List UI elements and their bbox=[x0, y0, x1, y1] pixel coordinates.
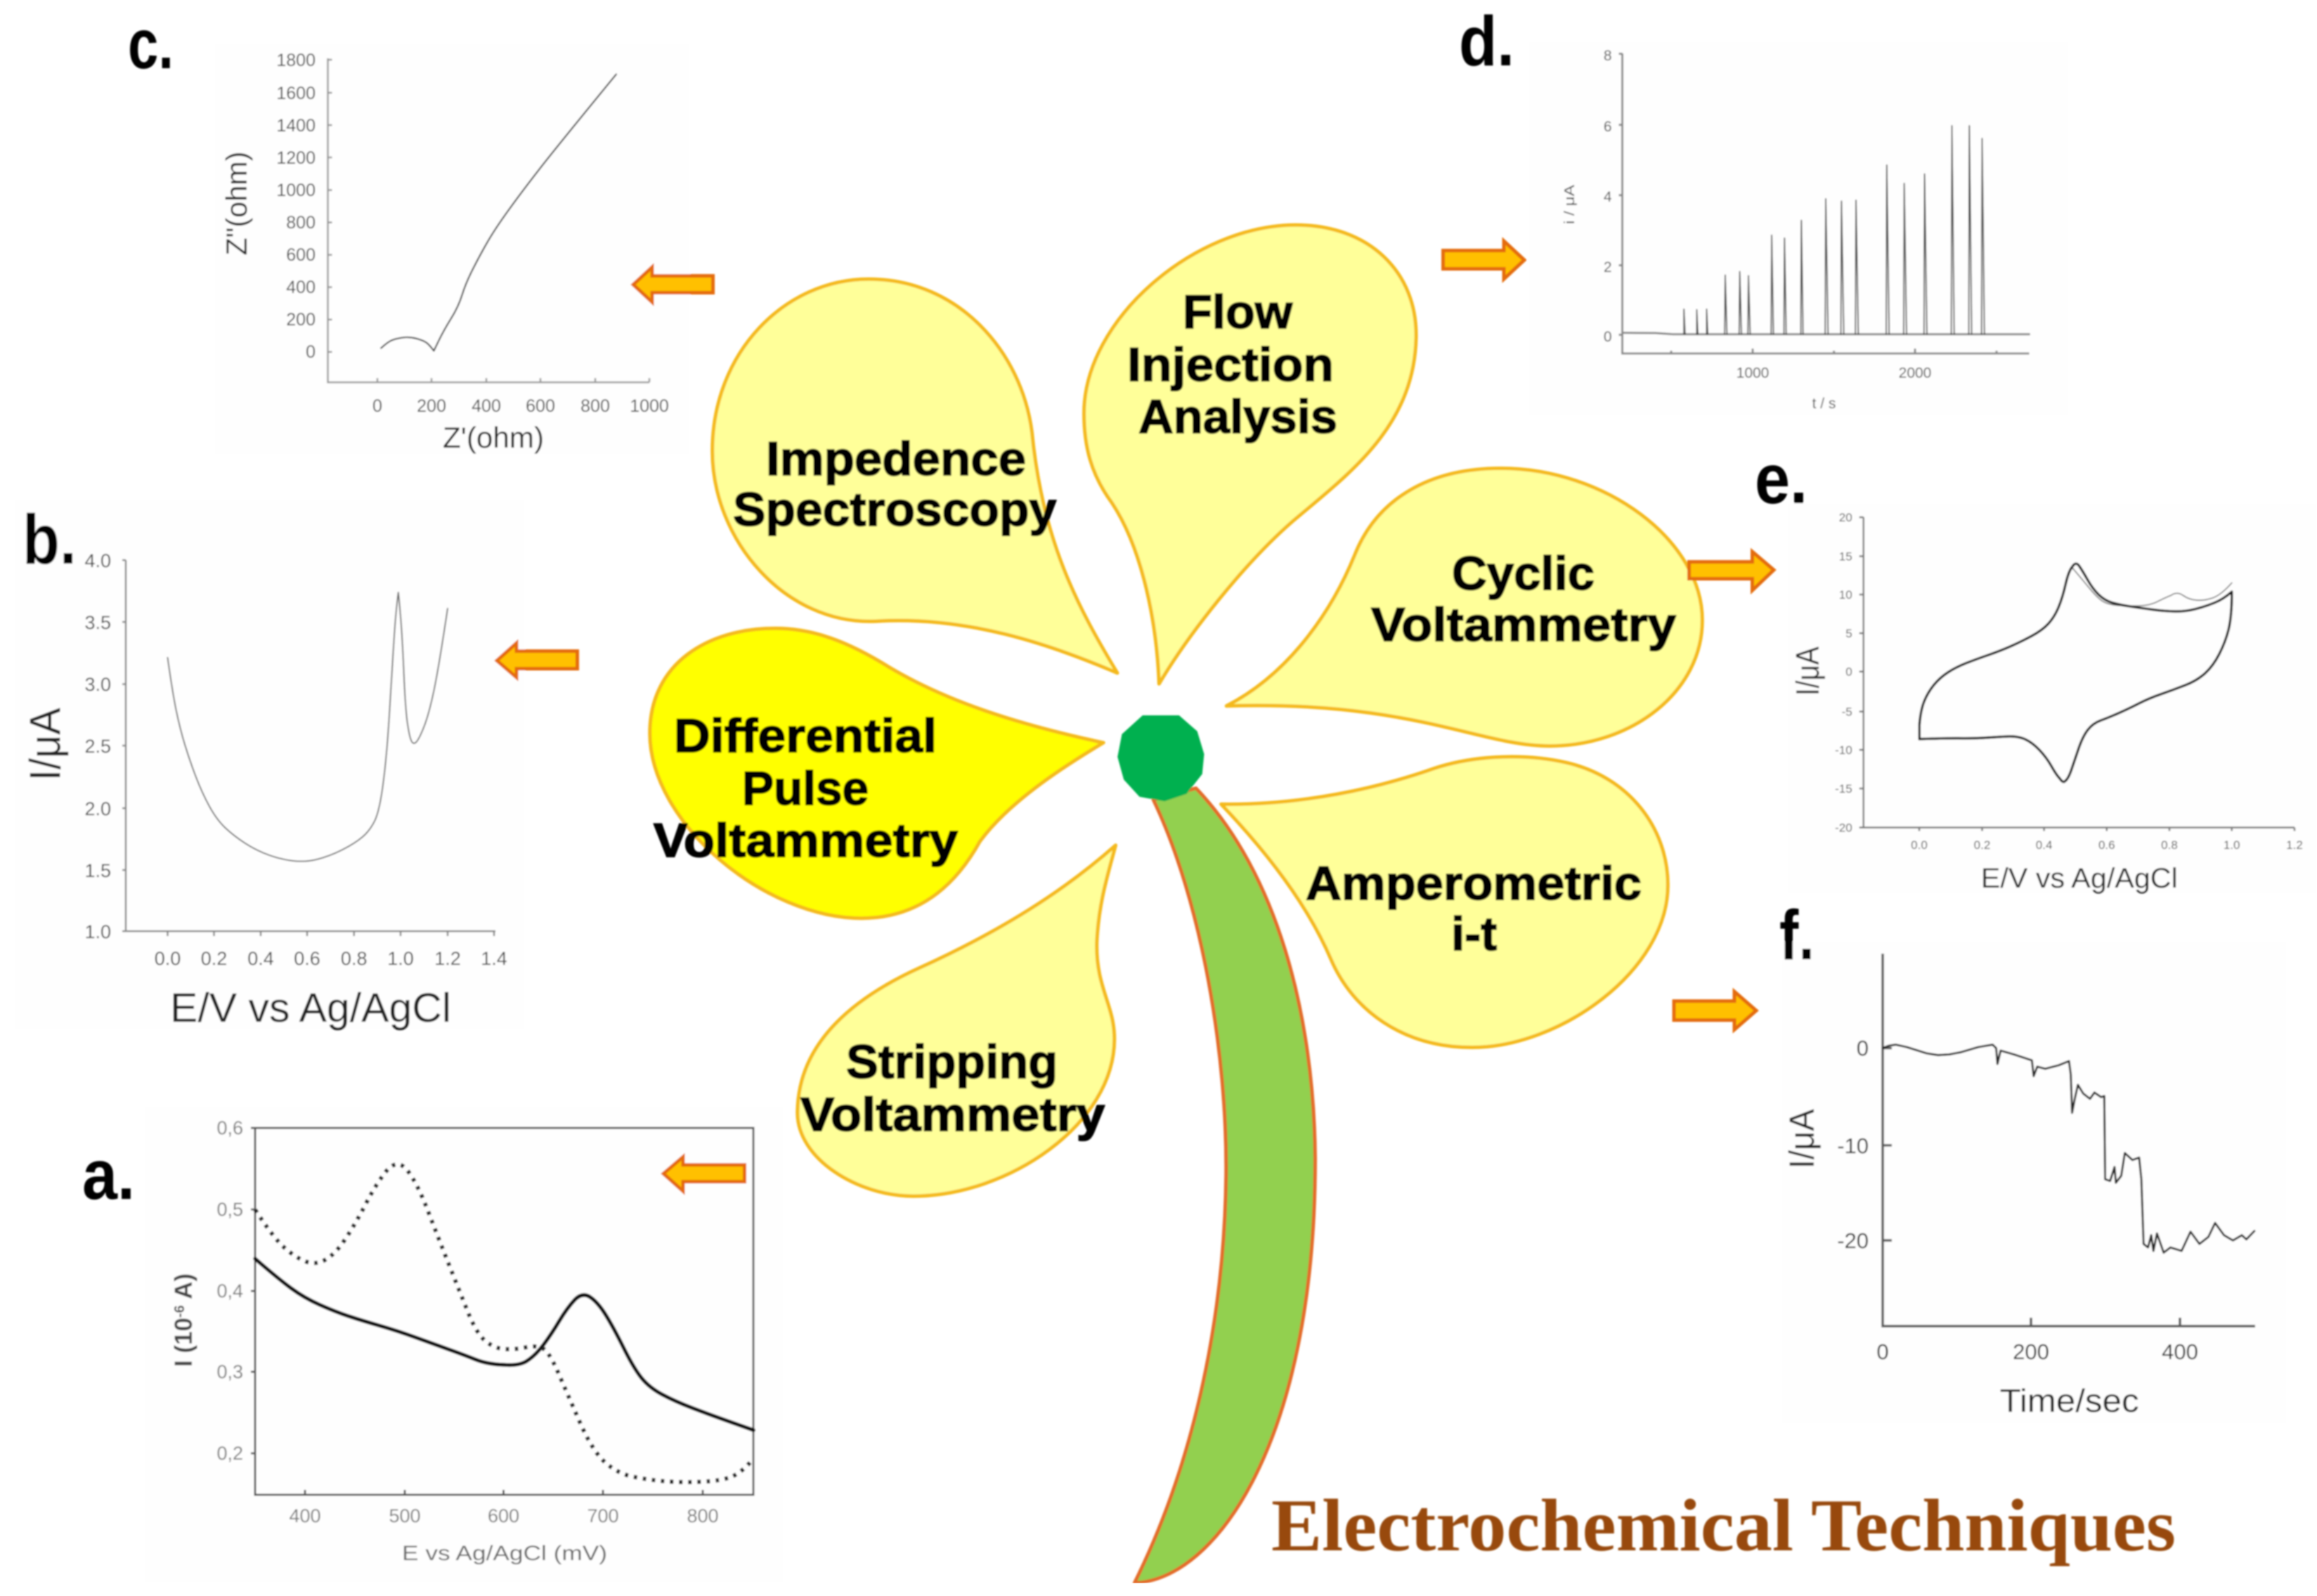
panel a y tick labels bbox=[216, 1117, 243, 1464]
panel b x tick labels bbox=[155, 948, 507, 969]
panel c x tick labels: 0 bbox=[372, 396, 382, 416]
panel c axes bbox=[327, 58, 649, 382]
arrow: flow injection to panel d bbox=[1443, 241, 1524, 279]
panel c letter: c. bbox=[128, 5, 174, 84]
panel a x tick labels: 400 bbox=[289, 1505, 321, 1526]
panel b y tick labels: 1.5 bbox=[84, 860, 111, 881]
label: cyclic voltammetry: Voltammetry bbox=[1371, 598, 1676, 651]
panel c x tick labels: 600 bbox=[526, 396, 555, 416]
panel e y tick labels: 15 bbox=[1839, 550, 1852, 564]
label: impedence spectroscopy: Spectroscopy bbox=[733, 483, 1056, 536]
panel e x tick labels: 0.8 bbox=[2161, 838, 2178, 852]
panel a x tick labels: 500 bbox=[389, 1505, 421, 1526]
panel c y tick labels: 600 bbox=[286, 245, 316, 265]
panel b y tick labels bbox=[84, 550, 111, 942]
label: differential pulse voltammetry: Pulse bbox=[742, 762, 869, 815]
panel b y tick labels: 2.5 bbox=[84, 736, 111, 757]
panel a x axis title: E vs Ag/AgCl (mV) bbox=[402, 1542, 607, 1565]
label: impedence spectroscopy: Impedence bbox=[766, 432, 1026, 486]
panel b letter: b. bbox=[22, 500, 77, 579]
panel d x tick labels: 1000 bbox=[1737, 365, 1769, 381]
panel e y tick labels: -10 bbox=[1835, 744, 1852, 757]
flower centre bbox=[1117, 715, 1204, 801]
panel f curve bbox=[1883, 1044, 2254, 1252]
panel c y tick labels: 800 bbox=[286, 213, 316, 233]
panel d y tick labels: 2 bbox=[1604, 259, 1612, 275]
panel a y axis title: -6 bbox=[172, 1305, 188, 1318]
label: amperometric i-t: Amperometric bbox=[1306, 857, 1642, 910]
panel b y tick labels: 3.5 bbox=[84, 612, 111, 633]
panel a letter: a. bbox=[82, 1136, 135, 1214]
panel d axes bbox=[1619, 53, 2030, 353]
label: flow injection analysis: Analysis bbox=[1138, 390, 1337, 443]
arrow: stripping to panel a bbox=[663, 1157, 745, 1191]
panel b axes bbox=[122, 560, 495, 936]
panel e x tick labels: 1.0 bbox=[2224, 838, 2240, 852]
label: amperometric i-t: i-t bbox=[1451, 907, 1497, 961]
title: Electrochemical Techniques bbox=[1271, 1484, 2176, 1566]
panel c x tick labels: 200 bbox=[417, 396, 446, 416]
panel a dotted curve bbox=[255, 1164, 753, 1482]
panel e x axis title: E/V vs Ag/AgCl bbox=[1981, 863, 2178, 894]
label: stripping voltammetry: Voltammetry bbox=[800, 1088, 1105, 1141]
panel a x tick labels: 600 bbox=[488, 1505, 519, 1526]
panel a frame and ticks bbox=[251, 1128, 753, 1495]
panel c: impedance Nyquist plot bbox=[128, 5, 690, 455]
petal: cyclic voltammetry bbox=[1226, 468, 1702, 746]
panel f x tick labels: 0 bbox=[1876, 1339, 1889, 1364]
panel e y tick labels: 20 bbox=[1839, 511, 1852, 524]
label: stripping voltammetry bbox=[800, 1035, 1105, 1141]
panel d y tick labels: 6 bbox=[1604, 119, 1612, 135]
panel a x tick labels: 700 bbox=[587, 1505, 619, 1526]
panel b x tick labels: 0.6 bbox=[294, 948, 320, 969]
panel b curve bbox=[168, 592, 448, 862]
panel b y tick labels: 3.0 bbox=[84, 674, 111, 695]
panel e y tick labels: 0 bbox=[1845, 666, 1852, 679]
panel c x tick labels: 1000 bbox=[630, 396, 669, 416]
panel d y tick labels: 4 bbox=[1604, 189, 1612, 205]
panel a y axis title: I (10 bbox=[170, 1318, 197, 1367]
panel d: flow injection amperogram bbox=[1459, 2, 2068, 415]
arrow: amperometric to panel f bbox=[1674, 992, 1756, 1030]
panel a y tick labels: 0,5 bbox=[216, 1199, 243, 1220]
panel b x axis title: E/V vs Ag/AgCl bbox=[170, 985, 451, 1031]
petal: stripping voltammetry bbox=[798, 845, 1116, 1196]
petal: impedence spectroscopy bbox=[713, 279, 1117, 673]
label: impedence spectroscopy bbox=[733, 432, 1056, 536]
panel d y axis title: i / μA bbox=[1562, 184, 1578, 224]
arrow: differential pulse to panel b bbox=[497, 643, 578, 677]
panel c y tick labels: 0 bbox=[306, 342, 316, 362]
panel e: cyclic voltammogram bbox=[1755, 440, 2317, 894]
panel f letter: f. bbox=[1779, 896, 1815, 975]
arrow: impedence to panel c bbox=[633, 267, 713, 302]
panel c x tick labels: 400 bbox=[472, 396, 501, 416]
panel c y tick labels bbox=[276, 51, 316, 362]
panel d baseline bbox=[1623, 333, 2029, 335]
panel c y tick labels: 1000 bbox=[276, 181, 316, 200]
panel e y axis title: I/μA bbox=[1789, 647, 1826, 696]
panel c x tick labels: 800 bbox=[580, 396, 610, 416]
panel a x tick labels: 800 bbox=[687, 1505, 719, 1526]
panel b x tick labels: 0.0 bbox=[155, 948, 181, 969]
panel b y axis title: I/μA bbox=[21, 707, 70, 781]
panel b y tick labels: 1.0 bbox=[84, 921, 111, 942]
panel d x tick labels bbox=[1737, 365, 1931, 381]
flower stem bbox=[1134, 789, 1315, 1583]
panel e x tick labels: 0.6 bbox=[2098, 838, 2115, 852]
panel f: amperometric i-t curve bbox=[1779, 896, 2287, 1424]
panel c y tick labels: 1200 bbox=[276, 148, 316, 168]
panel f y tick labels bbox=[1837, 1036, 1869, 1253]
panel b x tick labels: 1.0 bbox=[387, 948, 414, 969]
label: flow injection analysis bbox=[1127, 285, 1337, 443]
panel c y tick labels: 1800 bbox=[276, 51, 316, 70]
panel d y tick labels: 0 bbox=[1604, 329, 1612, 345]
panel e thin cycle line bbox=[2072, 568, 2232, 606]
panel d y tick labels bbox=[1604, 48, 1612, 345]
panel e x tick labels: 0.4 bbox=[2036, 838, 2052, 852]
panel d x axis title: t / s bbox=[1812, 396, 1836, 412]
panel b x tick labels: 1.2 bbox=[434, 948, 461, 969]
panel d letter: d. bbox=[1459, 2, 1514, 81]
panel e y tick labels: -5 bbox=[1842, 706, 1852, 718]
petal: flow injection analysis bbox=[1084, 225, 1416, 684]
panel f y tick labels: -20 bbox=[1837, 1228, 1869, 1253]
petal: amperometric i-t bbox=[1221, 757, 1668, 1047]
panel d current peaks bbox=[1684, 126, 1985, 335]
panel c x axis title: Z'(ohm) bbox=[443, 421, 544, 454]
panel a: stripping voltammogram bbox=[82, 1106, 784, 1583]
label: cyclic voltammetry: Cyclic bbox=[1452, 547, 1595, 600]
panel f y tick labels: 0 bbox=[1857, 1036, 1869, 1060]
panel e letter: e. bbox=[1755, 440, 1807, 519]
panel f axes bbox=[1883, 954, 2255, 1326]
panel b y tick labels: 4.0 bbox=[84, 550, 111, 571]
panel c x tick labels bbox=[372, 396, 669, 416]
panel f x axis title: Time/sec bbox=[2000, 1382, 2139, 1419]
panel a solid curve bbox=[255, 1259, 753, 1430]
panel e y tick labels: 5 bbox=[1845, 627, 1852, 640]
panel c y tick labels: 1400 bbox=[276, 116, 316, 136]
panel e axes bbox=[1860, 517, 2295, 831]
label: differential pulse voltammetry bbox=[654, 709, 958, 867]
panel a y tick labels: 0,2 bbox=[216, 1443, 243, 1464]
label: flow injection analysis: Flow bbox=[1183, 285, 1293, 339]
label: amperometric i-t bbox=[1306, 857, 1642, 961]
panel c curve bbox=[381, 74, 616, 351]
label: cyclic voltammetry bbox=[1371, 547, 1676, 651]
label: differential pulse voltammetry: Voltammetry bbox=[654, 814, 958, 867]
panel e x tick labels: 0.0 bbox=[1911, 838, 1928, 852]
panel e main voltammogram loop bbox=[1919, 564, 2232, 782]
label: flow injection analysis: Injection bbox=[1127, 338, 1334, 391]
panel b: differential pulse voltammogram bbox=[15, 499, 525, 1031]
panel c y axis title: Z"(ohm) bbox=[220, 152, 253, 256]
panel e x tick labels: 0.2 bbox=[1974, 838, 1990, 852]
panel e y tick labels bbox=[1835, 511, 1852, 835]
panel f y axis title: I/μA bbox=[1782, 1108, 1822, 1169]
panel a y tick labels: 0,6 bbox=[216, 1117, 243, 1138]
panel e x tick labels: 1.2 bbox=[2286, 838, 2303, 852]
panel e y tick labels: 10 bbox=[1839, 588, 1852, 602]
panel c y tick labels: 1600 bbox=[276, 84, 316, 103]
panel f x tick labels: 400 bbox=[2162, 1339, 2198, 1364]
label: stripping voltammetry: Stripping bbox=[846, 1035, 1058, 1089]
label: differential pulse voltammetry: Differential bbox=[674, 709, 937, 763]
panel d x tick labels: 2000 bbox=[1899, 365, 1931, 381]
panel b x tick labels: 1.4 bbox=[481, 948, 507, 969]
panel f x tick labels bbox=[1876, 1339, 2198, 1364]
panel d y tick labels: 8 bbox=[1604, 48, 1612, 64]
panel f y tick labels: -10 bbox=[1837, 1134, 1869, 1158]
petal: differential pulse voltammetry, highlighted bbox=[650, 628, 1103, 919]
panel b x tick labels: 0.2 bbox=[201, 948, 227, 969]
panel e y tick labels: -20 bbox=[1835, 821, 1852, 835]
panel e x tick labels bbox=[1911, 838, 2303, 852]
panel a y axis title: A) bbox=[170, 1273, 197, 1305]
panel a x tick labels bbox=[289, 1505, 719, 1526]
panel f x tick labels: 200 bbox=[2013, 1339, 2049, 1364]
panel c y tick labels: 400 bbox=[286, 278, 316, 297]
panel a y tick labels: 0,4 bbox=[216, 1280, 243, 1302]
panel b x tick labels: 0.8 bbox=[341, 948, 367, 969]
arrow: cyclic to panel e bbox=[1689, 552, 1774, 590]
panel e y tick labels: -15 bbox=[1835, 782, 1852, 796]
panel b x tick labels: 0.4 bbox=[247, 948, 274, 969]
panel b y tick labels: 2.0 bbox=[84, 798, 111, 819]
panel c y tick labels: 200 bbox=[286, 310, 316, 330]
panel a y tick labels: 0,3 bbox=[216, 1361, 243, 1382]
